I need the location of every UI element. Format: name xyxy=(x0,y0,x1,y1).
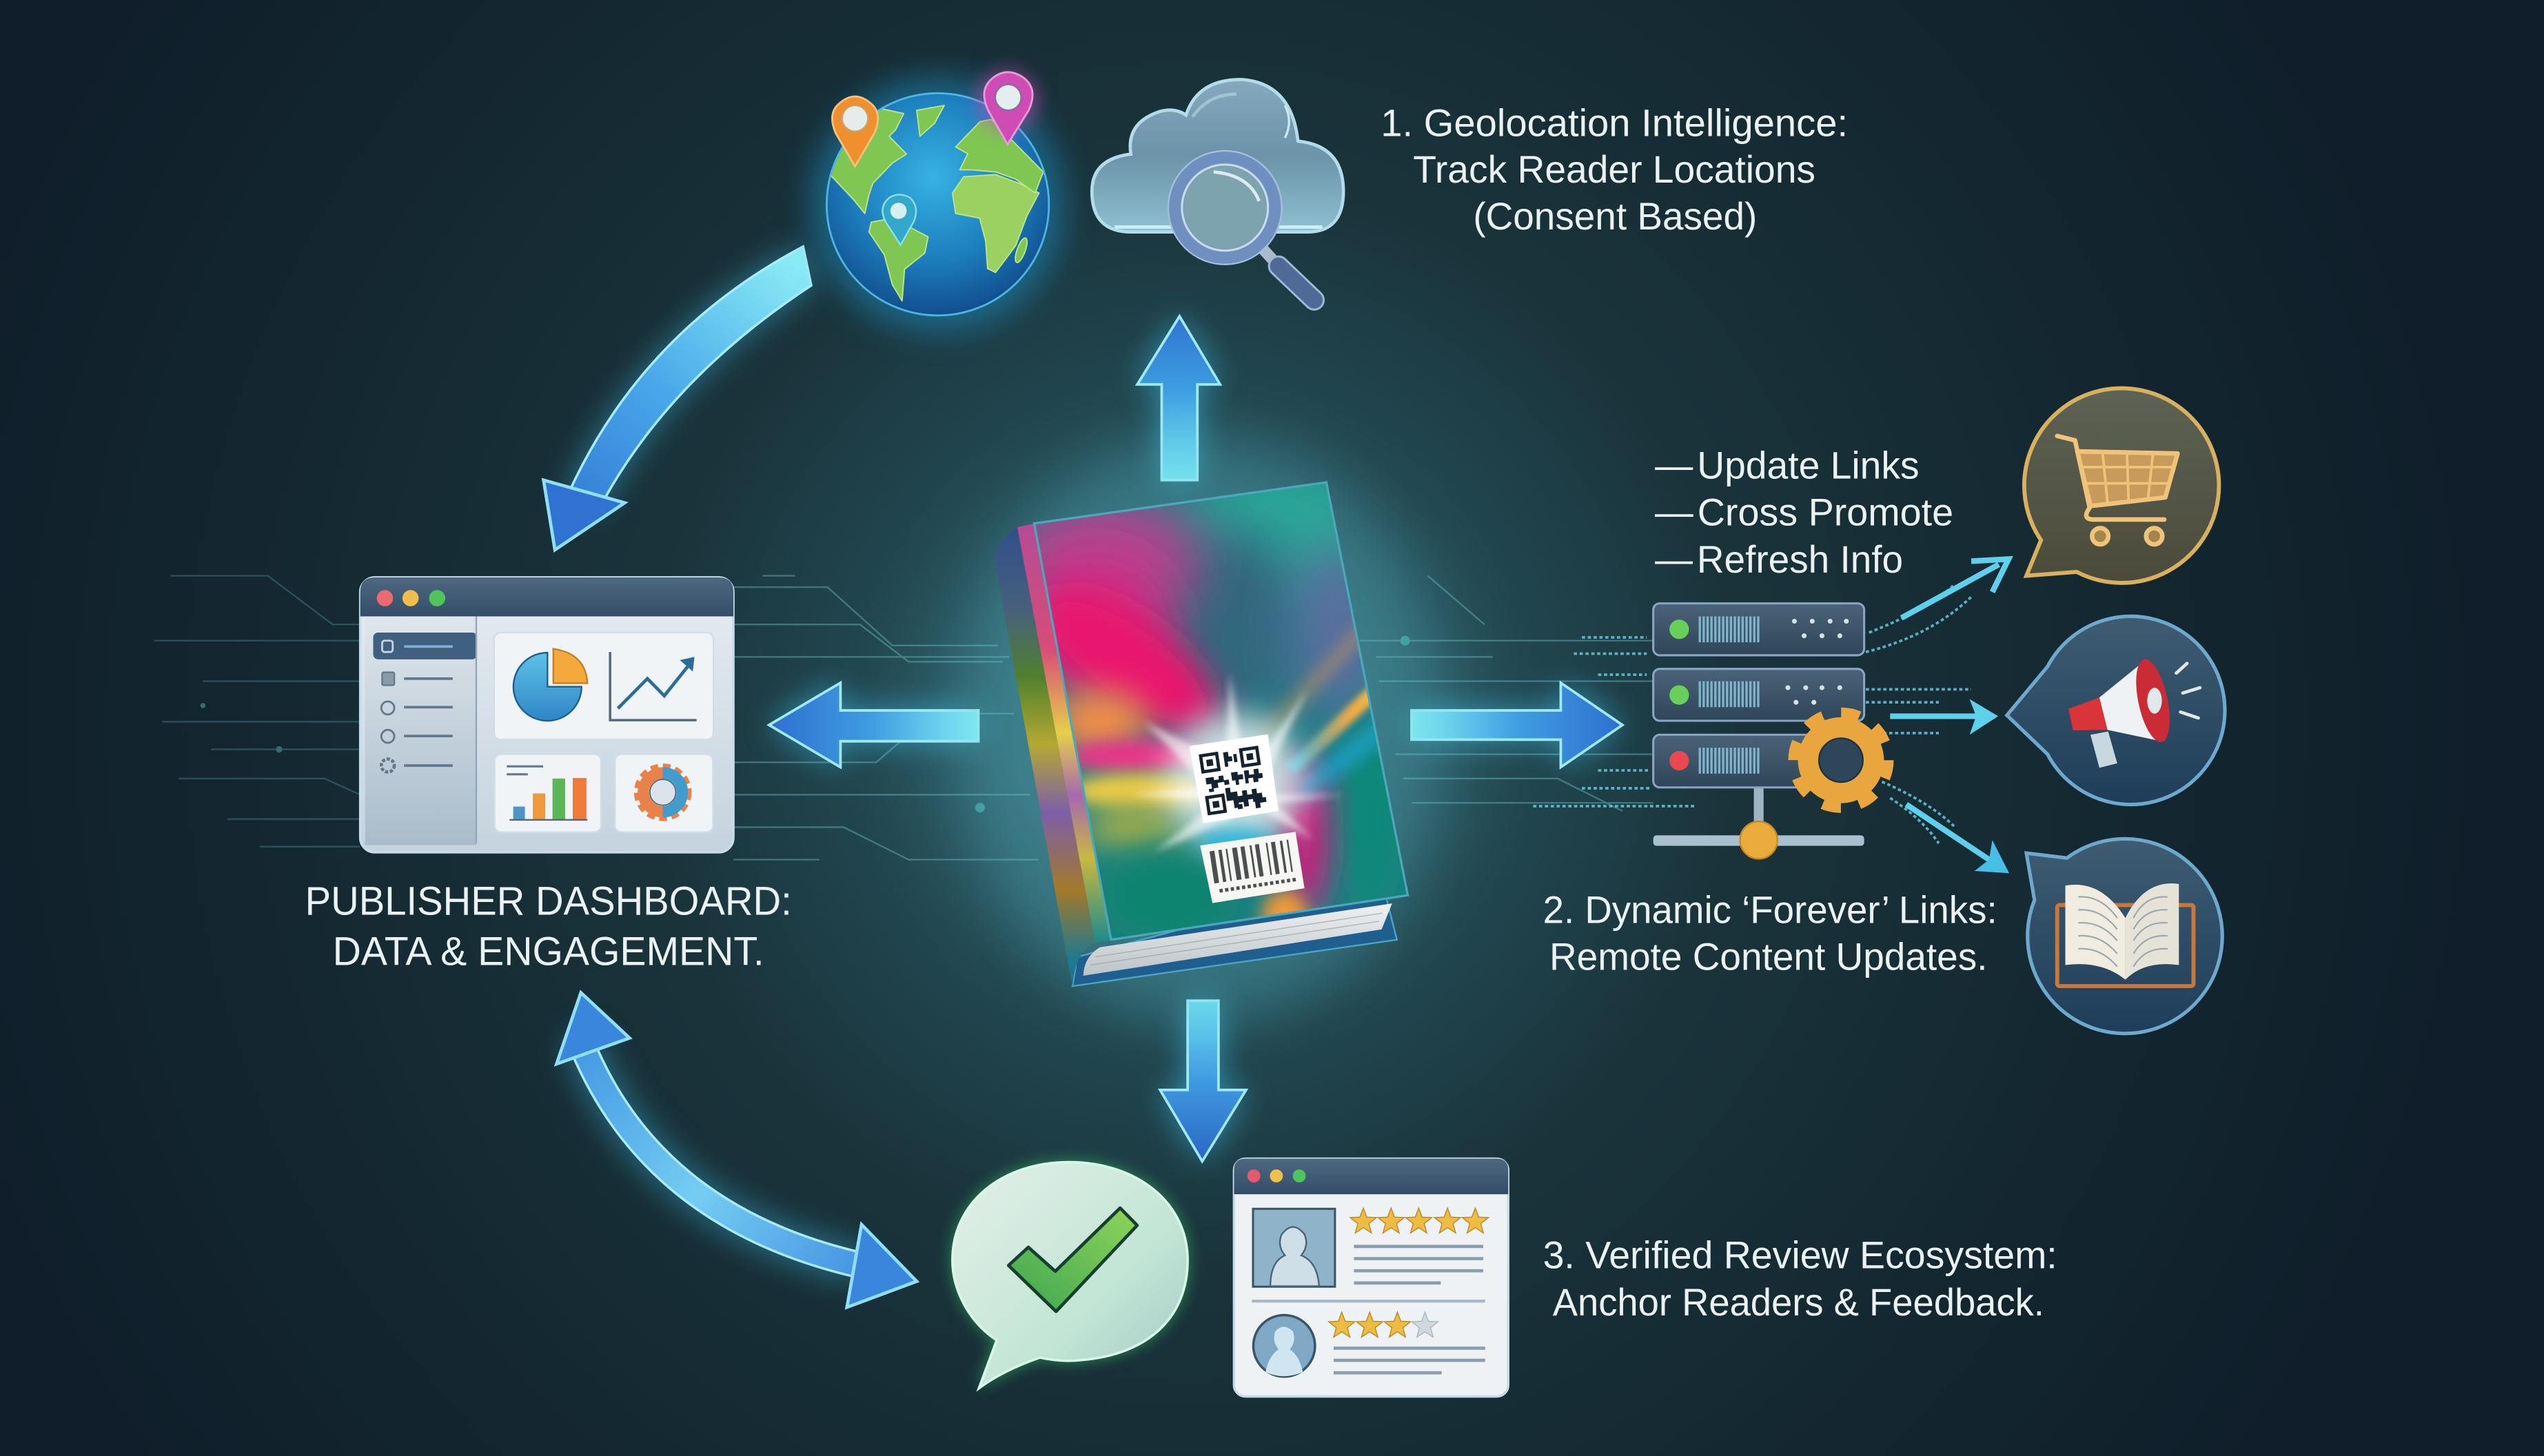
text: verified review ecosystem: Anchor Readers & Feedback. xyxy=(1553,1281,2044,1324)
rack 1 xyxy=(1653,604,1864,655)
barcode xyxy=(1200,832,1305,903)
text: publisher dashboard: DATA & ENGAGEMENT. xyxy=(333,930,764,974)
pie and line chart card xyxy=(494,633,713,739)
text: publisher dashboard: PUBLISHER DASHBOARD: xyxy=(305,879,792,924)
title bar xyxy=(1234,1159,1508,1194)
panel: review window xyxy=(1234,1159,1508,1397)
circuit lines: between dashboard and book xyxy=(733,576,1039,860)
sidebar xyxy=(365,618,477,845)
arrow: left xyxy=(769,683,978,767)
cart xyxy=(2057,436,2177,544)
gear card xyxy=(615,755,713,832)
text: update list: — Refresh Info xyxy=(1655,538,1903,581)
text: dynamic forever links: Remote Content Updates. xyxy=(1549,936,1988,978)
rack 3 xyxy=(1653,735,1864,788)
icon: server stack with gear xyxy=(1653,604,1886,859)
text: publisher dashboard xyxy=(305,879,792,974)
panel: publisher dashboard window xyxy=(360,577,733,852)
icon: check mark xyxy=(1008,1208,1137,1311)
icon: magnifier xyxy=(1168,151,1314,300)
QR code xyxy=(1189,735,1279,823)
text: dynamic forever links xyxy=(1543,888,1997,978)
circuit lines: left of dashboard xyxy=(154,576,360,847)
arrow: dashboard and review loop xyxy=(556,993,917,1307)
stand xyxy=(1653,787,1864,859)
arrow: up xyxy=(1137,316,1220,480)
data streams from server xyxy=(1533,584,1971,843)
arrow: globe to dashboard xyxy=(544,247,811,550)
text: geolocation intelligence: Track Reader Locations xyxy=(1413,148,1815,191)
text: verified review ecosystem: 3. Verified Review Ecosystem: xyxy=(1543,1234,2057,1277)
book with QR code and barcode xyxy=(957,438,1444,1022)
icon: open book bubble xyxy=(2026,839,2222,1034)
icon: shopping cart bubble xyxy=(2024,388,2219,583)
text: update list: — Update Links xyxy=(1655,444,1920,486)
icon: cloud with magnifying glass xyxy=(1092,79,1343,300)
icon: globe with location pins xyxy=(811,68,1064,331)
page block xyxy=(1083,903,1392,976)
text: dynamic forever links: 2. Dynamic ‘Forever’ Links: xyxy=(1543,888,1997,931)
text: geolocation intelligence: 1. Geolocation Intelligence: xyxy=(1381,102,1848,145)
reviewer 2 xyxy=(1253,1312,1485,1377)
icon: verified check speech bubble xyxy=(953,1162,1188,1388)
reviewer 1 xyxy=(1253,1208,1488,1286)
arrow: down xyxy=(1160,1001,1246,1161)
circuit lines: right of book xyxy=(1360,576,1653,811)
cover xyxy=(1035,484,1406,939)
text: geolocation intelligence xyxy=(1381,102,1848,238)
starburst glow xyxy=(1128,673,1347,860)
back cover xyxy=(1072,876,1397,986)
icon: megaphone bubble xyxy=(2007,616,2225,804)
arrow: server to megaphone xyxy=(1890,699,1998,735)
icon: orange pin xyxy=(832,96,878,166)
text: verified review ecosystem xyxy=(1543,1234,2057,1324)
icon: magenta pin xyxy=(975,68,1040,144)
arrow: right xyxy=(1412,683,1622,767)
text: geolocation intelligence: (Consent Based) xyxy=(1473,195,1757,238)
icon: cyan pin xyxy=(882,194,916,245)
rack 2 xyxy=(1653,669,1864,721)
arrow: server to cart xyxy=(1902,559,2008,618)
bar chart card xyxy=(495,755,601,832)
title bar xyxy=(360,577,733,616)
gear xyxy=(1795,715,1886,806)
arrow: server to book bubble xyxy=(1906,804,2009,873)
text: update list: — Cross Promote xyxy=(1655,491,1953,534)
spine xyxy=(994,524,1110,986)
text: update list xyxy=(1655,444,1953,581)
